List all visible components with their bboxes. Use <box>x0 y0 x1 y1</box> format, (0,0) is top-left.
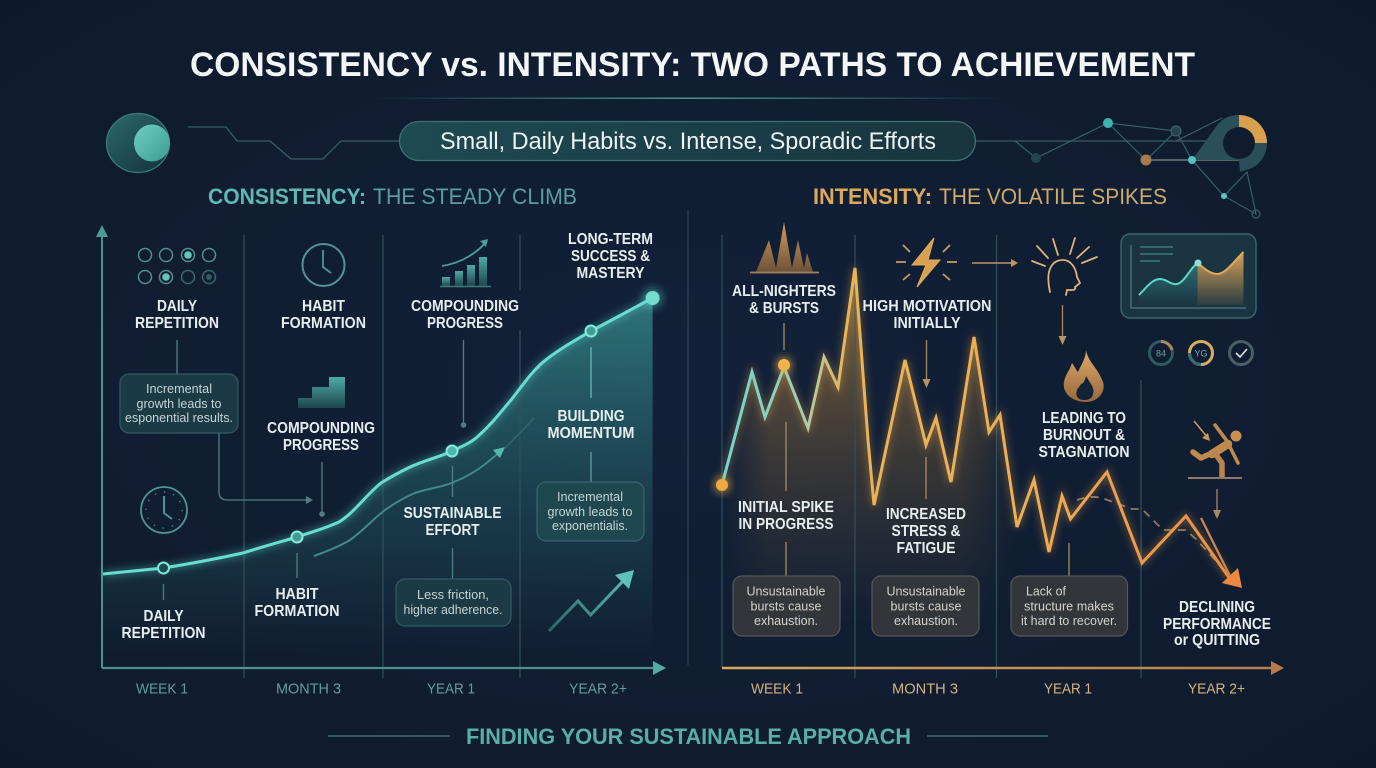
callout: unsustainable bursts 2 <box>872 576 979 636</box>
label: high motivation: HIGH MOTIVATION <box>862 298 992 315</box>
callout: unsustainable bursts 2: bursts cause <box>890 598 962 614</box>
callout: lack of structure: structure makes <box>1024 598 1114 614</box>
callout: exponentialis <box>537 482 644 541</box>
label: compounding progress left: COMPOUNDING <box>267 420 375 437</box>
area under growth curve <box>103 298 653 668</box>
network graphic with donut <box>976 115 1267 218</box>
callout: unsustainable bursts 1 <box>733 576 840 636</box>
growth curve <box>103 298 653 574</box>
heading: consistency <box>208 184 577 209</box>
label: leading to burnout: BURNOUT & <box>1043 427 1125 444</box>
timeline labels: YEAR 2+ <box>569 680 627 698</box>
icon: zigzag up arrow <box>549 570 634 631</box>
icon: falling figure <box>1188 421 1242 478</box>
label: leading to burnout: LEADING TO <box>1042 410 1126 427</box>
panel: mini chart dashboard <box>1121 234 1256 318</box>
label: habit formation upper: HABIT <box>302 298 345 315</box>
panel: consistency chart <box>96 225 666 698</box>
axes <box>96 225 666 675</box>
label: habit formation upper: FORMATION <box>281 315 366 332</box>
status rings: YG <box>1194 348 1208 358</box>
label: declining performance: or QUITTING <box>1174 632 1260 649</box>
spike line <box>722 268 1242 588</box>
label: increased stress <box>886 506 966 557</box>
label: daily repetition lower <box>122 608 206 642</box>
callout: unsustainable bursts 2: Unsustainable <box>886 584 966 598</box>
label: long-term success: SUCCESS & <box>571 248 650 265</box>
label: daily repetition upper <box>135 298 219 332</box>
label: leading to burnout <box>1038 410 1130 461</box>
label: daily repetition lower: DAILY <box>144 608 184 625</box>
label: sustainable effort <box>404 505 502 539</box>
callout: unsustainable bursts 1: bursts cause <box>750 598 822 614</box>
callout: exponentialis: exponentialis. <box>552 518 628 533</box>
callout: less friction: Less friction, <box>417 587 489 602</box>
subtitle pill: Small, Daily Habits vs. Intense, Sporadic Efforts <box>440 128 936 155</box>
label: habit formation upper <box>281 298 366 332</box>
time axis <box>722 661 1284 675</box>
label: compounding progress right: COMPOUNDING <box>411 298 519 315</box>
icon: flame <box>1064 350 1104 402</box>
label: sustainable effort: SUSTAINABLE <box>404 505 502 522</box>
status rings: 84 <box>1156 348 1166 358</box>
status rings <box>1150 342 1252 364</box>
icon: dots grid <box>138 248 216 284</box>
label: building momentum: BUILDING <box>558 408 624 425</box>
label: habit formation lower: HABIT <box>276 586 319 603</box>
arrow: elbow to compounding <box>219 433 313 504</box>
callout: incremental growth: Incremental <box>146 381 212 396</box>
label: daily repetition upper: REPETITION <box>135 315 219 332</box>
label: all-nighters: ALL-NIGHTERS <box>732 283 836 300</box>
label: initial spike <box>738 499 834 533</box>
arrow: head to flame <box>1058 305 1066 345</box>
label: compounding progress left: PROGRESS <box>283 437 359 454</box>
timeline labels: YEAR 1 <box>1044 680 1092 698</box>
subtitle pill <box>400 122 976 160</box>
heading: consistency: CONSISTENCY: <box>208 184 366 209</box>
label: declining performance: PERFORMANCE <box>1163 616 1271 633</box>
callout: incremental growth: esponential results. <box>125 410 233 425</box>
label: sustainable effort: EFFORT <box>426 522 480 539</box>
label: compounding progress left <box>267 420 375 454</box>
timeline labels: MONTH 3 <box>892 680 958 698</box>
label: habit formation lower <box>254 586 340 620</box>
area under spikes <box>734 282 1005 584</box>
arrow: down to decline <box>1213 489 1221 519</box>
callout: unsustainable bursts 2: exhaustion. <box>894 613 958 628</box>
timeline labels <box>751 680 1245 698</box>
label: long-term success <box>568 231 653 282</box>
icon: clock <box>302 244 344 286</box>
label: long-term success: LONG-TERM <box>568 231 653 248</box>
heading: intensity <box>813 184 1167 209</box>
footer heading: FINDING YOUR SUSTAINABLE APPROACH <box>466 724 911 749</box>
label: initial spike: INITIAL SPIKE <box>738 499 834 516</box>
connector with dot <box>461 340 466 428</box>
icon: overlapping circles <box>106 114 170 172</box>
arrow: down from motivation <box>922 340 930 388</box>
label: declining performance: DECLINING <box>1179 599 1255 616</box>
label: initial spike: IN PROGRESS <box>738 516 834 533</box>
callout: lack of structure: it hard to recover. <box>1021 613 1117 628</box>
label: habit formation lower: FORMATION <box>254 603 340 620</box>
label: daily repetition lower: REPETITION <box>122 625 206 642</box>
secondary trend arrow <box>314 418 534 556</box>
icon: mountain spikes <box>750 222 819 272</box>
timeline labels: WEEK 1 <box>751 680 803 698</box>
timeline labels: WEEK 1 <box>136 680 188 698</box>
callout: incremental growth <box>120 374 238 433</box>
heading: intensity: THE VOLATILE SPIKES <box>939 184 1167 209</box>
label: increased stress: STRESS & <box>892 523 960 540</box>
timeline labels: MONTH 3 <box>276 680 341 698</box>
heading: consistency: THE STEADY CLIMB <box>373 184 577 209</box>
timeline labels: YEAR 1 <box>427 680 475 698</box>
dashed projection <box>1077 497 1236 583</box>
title: CONSISTENCY vs. INTENSITY: TWO PATHS TO ACHIEVEMENT <box>190 46 1195 84</box>
label: daily repetition upper: DAILY <box>157 298 198 315</box>
label: long-term success: MASTERY <box>576 265 645 282</box>
label: building momentum <box>548 408 634 442</box>
callout: unsustainable bursts 1: exhaustion. <box>754 613 818 628</box>
icon: lightning <box>896 238 957 287</box>
connector with dot <box>319 462 325 517</box>
timeline labels <box>136 680 627 698</box>
arrow: to head <box>972 259 1018 267</box>
spike nodes <box>713 356 793 494</box>
label: compounding progress right <box>411 298 519 332</box>
callout: less friction <box>396 579 511 626</box>
panel: intensity chart <box>713 222 1284 698</box>
icon: rising bars <box>440 239 491 286</box>
curve nodes <box>158 287 664 574</box>
callout: exponentialis: Incremental <box>557 489 623 504</box>
label: leading to burnout: STAGNATION <box>1038 444 1130 461</box>
label: increased stress: INCREASED <box>886 506 966 523</box>
callout: lack of structure: Lack of <box>1026 584 1066 598</box>
label: all-nighters: & BURSTS <box>749 300 819 317</box>
label: high motivation <box>862 298 992 332</box>
callout: exponentialis: growth leads to <box>548 504 632 519</box>
icon: stairs <box>298 377 345 408</box>
callout: less friction: higher adherence. <box>404 602 502 617</box>
heading: intensity: INTENSITY: <box>813 184 932 209</box>
label: declining performance <box>1163 599 1271 649</box>
icon: head with rays <box>1032 238 1097 295</box>
label: all-nighters <box>732 283 836 317</box>
label: compounding progress right: PROGRESS <box>427 315 503 332</box>
label: increased stress: FATIGUE <box>896 540 956 557</box>
label: building momentum: MOMENTUM <box>548 425 634 442</box>
timeline labels: YEAR 2+ <box>1188 680 1245 698</box>
callout: unsustainable bursts 1: Unsustainable <box>746 584 826 598</box>
callout: incremental growth: growth leads to <box>136 396 222 411</box>
icon: lower clock <box>141 487 187 533</box>
label: high motivation: INITIALLY <box>894 315 961 332</box>
callout: lack of structure <box>1011 576 1128 636</box>
